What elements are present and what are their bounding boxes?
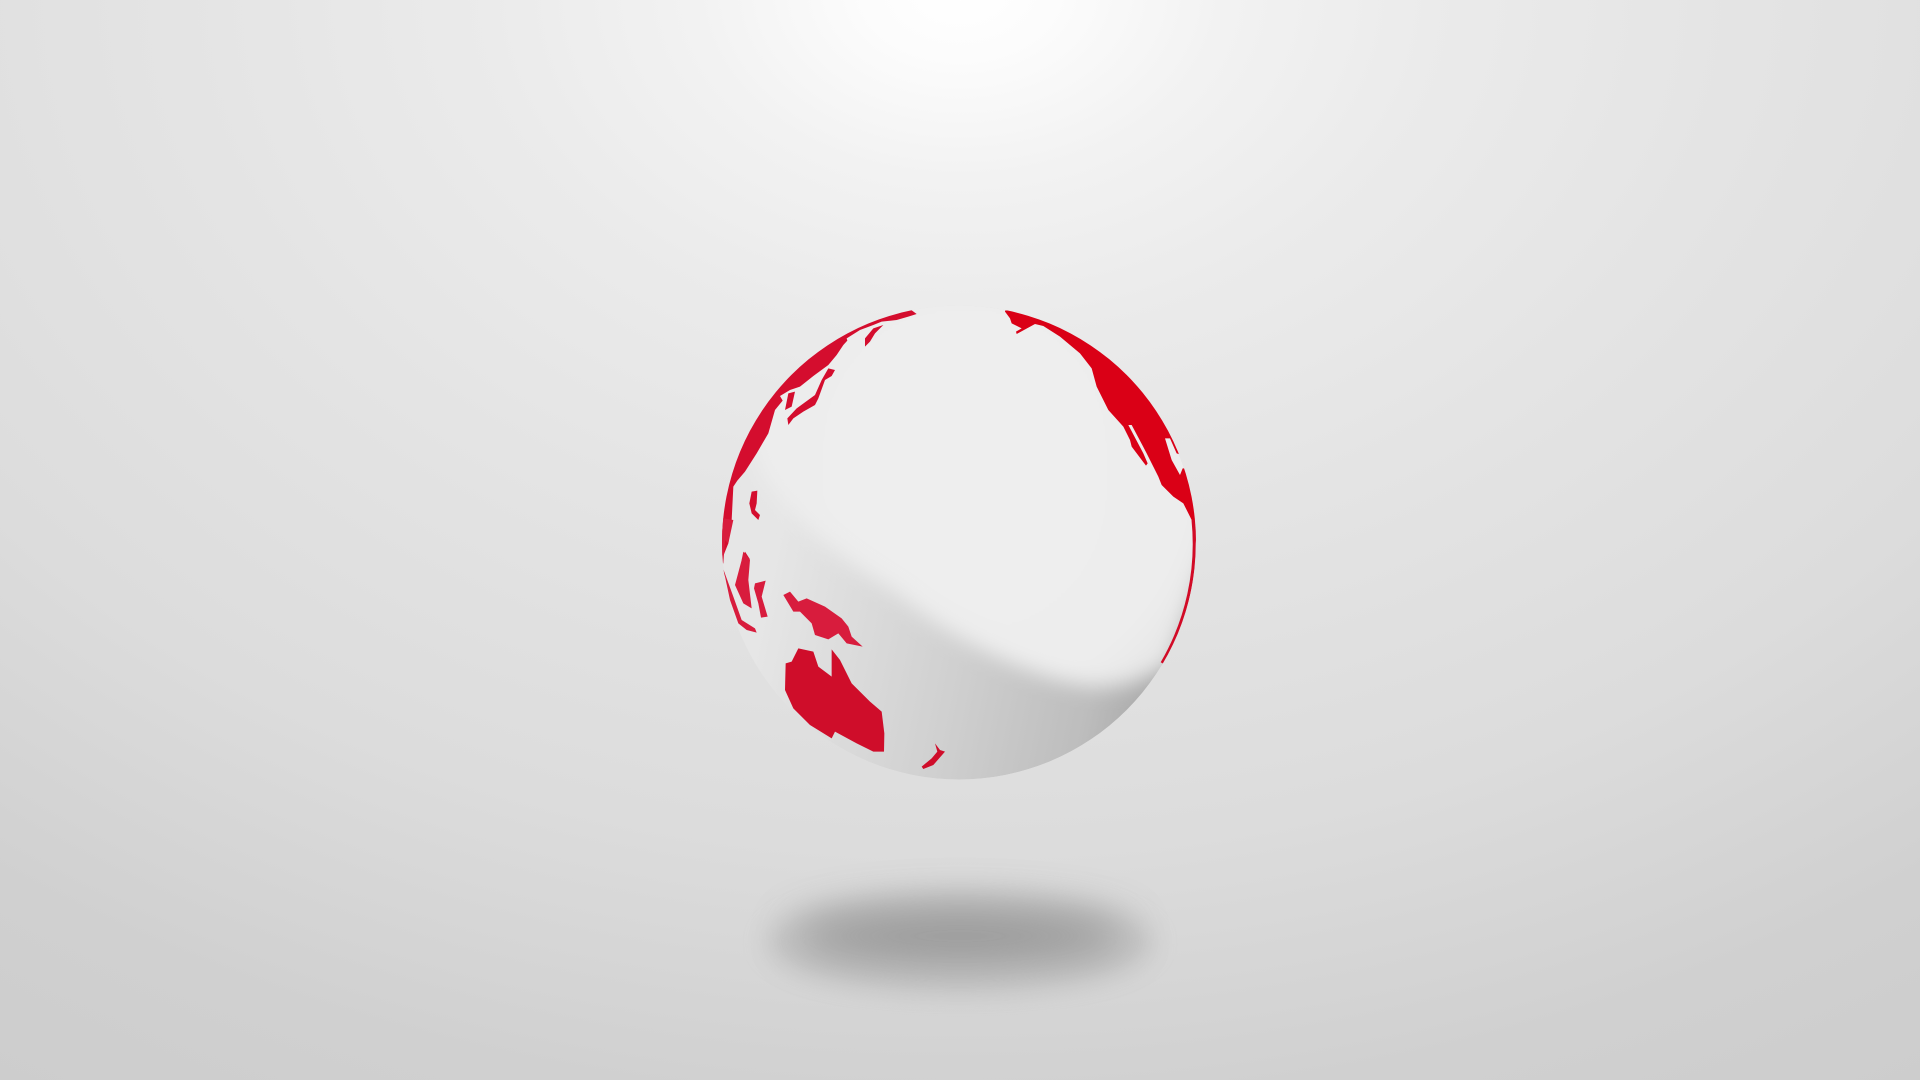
globe	[722, 310, 1196, 780]
landmass: thin rim on right edge	[1162, 520, 1194, 663]
landmass: east Asia upper left	[718, 307, 917, 560]
floor shadow	[765, 892, 1155, 992]
landmass: Americas upper right	[1005, 310, 1196, 544]
sphere body	[796, 477, 1192, 780]
landmass: Indonesia, New Guinea, Australia, New Zealand	[720, 517, 945, 769]
